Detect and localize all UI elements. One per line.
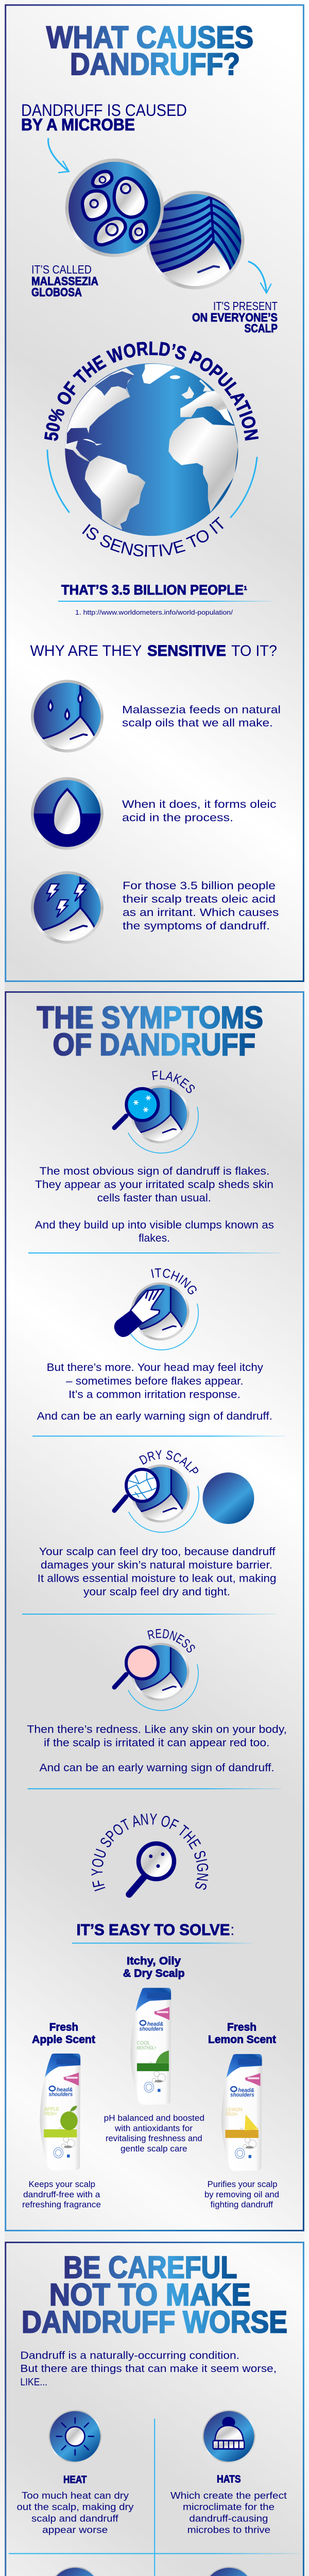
- text: flakes description: flakes.: [139, 1232, 170, 1244]
- label: itchy oily dry scalp: Itchy, Oily: [127, 1955, 181, 1967]
- text: ph balanced: revitalising freshness and: [106, 2134, 202, 2143]
- text: malassezia feeds: [122, 704, 281, 729]
- title: be careful not to make dandruff worse: BE CAREFUL: [63, 2250, 237, 2285]
- heading: dandruff is caused by a microbe: [21, 101, 187, 134]
- title: the symptoms of dandruff: OF DANDRUFF: [53, 1027, 255, 1062]
- text: dry scalp description: damages your skin’s natural moisture barrier.: [41, 1559, 272, 1571]
- product: cool menthol bottle: shoulders: [140, 2026, 163, 2032]
- text: hats description: Which create the perfect: [170, 2490, 287, 2501]
- label: fresh apple scent: [32, 2022, 95, 2045]
- text: flakes description: [35, 1165, 274, 1244]
- curved text: if you spot any of the signs: IF YOU SPOT ANY OF THE SIGNS: [92, 1814, 208, 1892]
- text: forms oleic acid: When it does, it forms oleic: [122, 799, 276, 810]
- text: redness description: And can be an early warning sign of dandruff.: [39, 1762, 274, 1774]
- text: heat description: appear worse: [42, 2524, 108, 2535]
- stat: 3.5 billion people: 1: [244, 585, 247, 591]
- icon: hat: [202, 2410, 255, 2463]
- heading: why are they sensitive to it: [30, 642, 277, 659]
- text: symptoms cause: For those 3.5 billion people: [123, 880, 276, 892]
- curved label: itching: ITCHING: [151, 1268, 197, 1294]
- icon: scalp irritation bolts: [31, 871, 111, 944]
- text: intro: [20, 2350, 277, 2388]
- heading: dandruff is caused by a microbe: DANDRUFF IS CAUSED: [21, 101, 187, 120]
- product: apple fresh bottle: FRESH+: [44, 2111, 57, 2117]
- label: itchy oily dry scalp: & Dry Scalp: [123, 1968, 185, 1979]
- heading: heat: HEAT: [63, 2474, 87, 2485]
- product: cool menthol bottle: [130, 1988, 171, 2105]
- text: dry scalp description: Your scalp can feel dry too, because dandruff: [39, 1546, 276, 1558]
- panel: what causes dandruff: [5, 4, 304, 982]
- text: itching description: [37, 1362, 272, 1422]
- icon: scalp hair circle: [144, 191, 245, 292]
- panel: symptoms of dandruff: [5, 991, 304, 2231]
- text: symptoms cause: as an irritant. Which causes: [123, 907, 279, 919]
- text: symptoms cause: the symptoms of dandruff.: [123, 920, 270, 932]
- arrow: to scalp label: [249, 262, 271, 293]
- text: keeps your scalp: [22, 2180, 101, 2210]
- icon: heat sun: [48, 2410, 101, 2463]
- text: heat description: [16, 2490, 134, 2535]
- text: hats description: [170, 2490, 287, 2535]
- text: itching description: It’s a common irritation response.: [68, 1389, 241, 1401]
- text: redness description: if the scalp is irritated it can appear red too.: [44, 1737, 270, 1749]
- label: it's called malassezia globosa: MALASSEZIA: [31, 274, 98, 287]
- arrow: to microbe: [48, 139, 69, 173]
- product: lemon fresh bottle: head&: [238, 2087, 254, 2094]
- text: hats description: microbes to thrive: [187, 2524, 270, 2535]
- text: flakes description: The most obvious sign of dandruff is flakes.: [39, 1165, 270, 1177]
- product: apple fresh bottle: APPLE: [44, 2107, 59, 2112]
- heading: it's easy to solve: :: [230, 1921, 235, 1939]
- curved label: redness: REDNESS: [147, 1629, 195, 1653]
- icon: scalp oil drops: [31, 680, 111, 752]
- product: cool menthol bottle: COOL: [137, 2040, 150, 2046]
- footnote: 1. http://www.worldometers.info/world-population/: [75, 608, 233, 616]
- heading: hats: HATS: [217, 2473, 241, 2485]
- title: what causes dandruff: [46, 20, 253, 81]
- title: be careful not to make dandruff worse: NOT TO MAKE: [49, 2278, 251, 2312]
- icon: flakes: [114, 1085, 198, 1153]
- text: symptoms cause: [123, 880, 279, 932]
- text: ph balanced: gentle scalp care: [121, 2144, 187, 2154]
- label: itchy oily dry scalp: [123, 1955, 185, 1979]
- text: ph balanced: pH balanced and boosted: [104, 2113, 204, 2123]
- label: fresh apple scent: Apple Scent: [32, 2034, 95, 2045]
- text: dry scalp description: [38, 1546, 276, 1598]
- icon: itching: [114, 1282, 198, 1350]
- text: keeps your scalp: refreshing fragrance: [22, 2200, 101, 2210]
- label: it's present on everyone's scalp: IT'S PRESENT: [213, 299, 278, 313]
- text: forms oleic acid: acid in the process.: [122, 812, 233, 824]
- text: keeps your scalp: dandruff-free with a: [23, 2190, 100, 2199]
- text: flakes description: cells faster than usual.: [97, 1192, 211, 1204]
- decorative gradient circle: [203, 1472, 254, 1524]
- heading: why are they sensitive to it: WHY ARE THEY: [30, 642, 142, 659]
- curved text: 50% of the world's population: 50% OF THE WORLD’S POPULATION: [44, 341, 259, 441]
- text: itching description: And can be an early warning sign of dandruff.: [37, 1411, 272, 1422]
- label: it's present on everyone's scalp: [192, 299, 278, 335]
- title: the symptoms of dandruff: THE SYMPTOMS: [37, 1001, 263, 1035]
- product: cool menthol bottle: head&: [147, 2021, 164, 2027]
- text: intro: But there are things that can make it seem worse,: [20, 2363, 277, 2375]
- text: forms oleic acid: [122, 799, 276, 824]
- text: itching description: – sometimes before flakes appear.: [66, 1376, 244, 1387]
- text: intro: Dandruff is a naturally-occurring condition.: [20, 2350, 239, 2361]
- label: it's called malassezia globosa: GLOBOSA: [31, 285, 82, 299]
- label: it's present on everyone's scalp: SCALP: [244, 321, 278, 335]
- title: what causes dandruff: DANDRUFF?: [70, 47, 240, 81]
- text: purifies your scalp: by removing oil and: [204, 2190, 279, 2199]
- text: malassezia feeds: Malassezia feeds on natural: [122, 704, 281, 716]
- label: it's called malassezia globosa: [31, 263, 98, 299]
- heading: dandruff is caused by a microbe: BY A MICROBE: [21, 115, 135, 134]
- icon: microbe circle: [65, 159, 164, 257]
- curved label: dry scalp: DRY SCALP: [139, 1450, 199, 1473]
- product: lemon fresh bottle: shoulders: [230, 2092, 254, 2098]
- text: purifies your scalp: [204, 2180, 279, 2210]
- icon: redness: [114, 1642, 198, 1710]
- icon: stress bolt: [48, 2567, 101, 2576]
- product: lemon fresh bottle: [221, 2054, 262, 2171]
- icon: dry scalp: [114, 1464, 199, 1532]
- label: fresh apple scent: Fresh: [49, 2022, 78, 2033]
- product: apple fresh bottle: shoulders: [49, 2091, 73, 2098]
- title: what causes dandruff: WHAT CAUSES: [46, 20, 253, 55]
- product: apple fresh bottle: head&: [57, 2087, 73, 2093]
- text: heat description: out the scalp, making dry: [16, 2501, 134, 2512]
- icon: globe: [65, 363, 238, 536]
- heading: why are they sensitive to it: TO IT?: [231, 642, 277, 659]
- panel: be careful: [6, 2242, 303, 2576]
- icon: magnifying glass: [129, 1843, 174, 1894]
- text: heat description: Too much heat can dry: [22, 2490, 129, 2501]
- label: fresh lemon scent: Fresh: [227, 2022, 256, 2033]
- text: flakes description: And they build up into visible clumps known as: [35, 1219, 274, 1231]
- text: heat description: scalp and dandruff: [31, 2513, 119, 2523]
- text: symptoms cause: their scalp treats oleic acid: [123, 893, 276, 905]
- text: keeps your scalp: Keeps your scalp: [29, 2180, 95, 2189]
- title: the symptoms of dandruff: [37, 1001, 263, 1062]
- heading: it's easy to solve: IT’S EASY TO SOLVE: [76, 1921, 230, 1939]
- text: hats description: microclimate for the: [183, 2501, 274, 2512]
- decoration: globe arcs: [47, 450, 257, 517]
- text: ph balanced: [104, 2113, 204, 2154]
- product: lemon fresh bottle: FRESH+: [226, 2112, 238, 2117]
- product: lemon fresh bottle: LEMON: [226, 2107, 243, 2113]
- label: it's called malassezia globosa: IT’S CALLED: [31, 263, 92, 276]
- text: purifies your scalp: fighting dandruff: [211, 2200, 273, 2210]
- heading: why are they sensitive to it: SENSITIVE: [147, 642, 226, 659]
- label: it's present on everyone's scalp: ON EVERYONE’S: [192, 311, 278, 324]
- text: dry scalp description: your scalp feel dry and tight.: [83, 1586, 230, 1598]
- text: dry scalp description: It allows essential moisture to leak out, making: [38, 1573, 276, 1585]
- text: malassezia feeds: scalp oils that we all make.: [122, 717, 273, 729]
- text: ph balanced: with antioxidants for: [114, 2124, 193, 2133]
- label: fresh lemon scent: Lemon Scent: [208, 2034, 276, 2045]
- label: fresh lemon scent: [208, 2022, 276, 2045]
- stat: 3.5 billion people: THAT’S 3.5 BILLION PEOPLE: [61, 582, 244, 598]
- curved label: flakes: FLAKES: [152, 1071, 195, 1093]
- text: hats description: dandruff-causing: [189, 2513, 268, 2523]
- text: itching description: But there’s more. Your head may feel itchy: [47, 1362, 264, 1374]
- curved text: is sensitive to it: IS SENSITIVE TO IT: [82, 516, 224, 557]
- text: purifies your scalp: Purifies your scalp: [208, 2180, 277, 2189]
- text: redness description: [27, 1724, 287, 1774]
- product: apple fresh bottle: [40, 2054, 80, 2171]
- product: cool menthol bottle: MENTHOL+: [137, 2045, 157, 2051]
- icon: pollution clouds: [202, 2567, 255, 2576]
- text: redness description: Then there’s redness. Like any skin on your body,: [27, 1724, 287, 1736]
- icon: oleic acid drop: [31, 777, 104, 850]
- text: intro: LIKE...: [20, 2377, 47, 2388]
- text: flakes description: They appear as your irritated scalp sheds skin: [35, 1179, 273, 1191]
- title: be careful not to make dandruff worse: [22, 2250, 287, 2339]
